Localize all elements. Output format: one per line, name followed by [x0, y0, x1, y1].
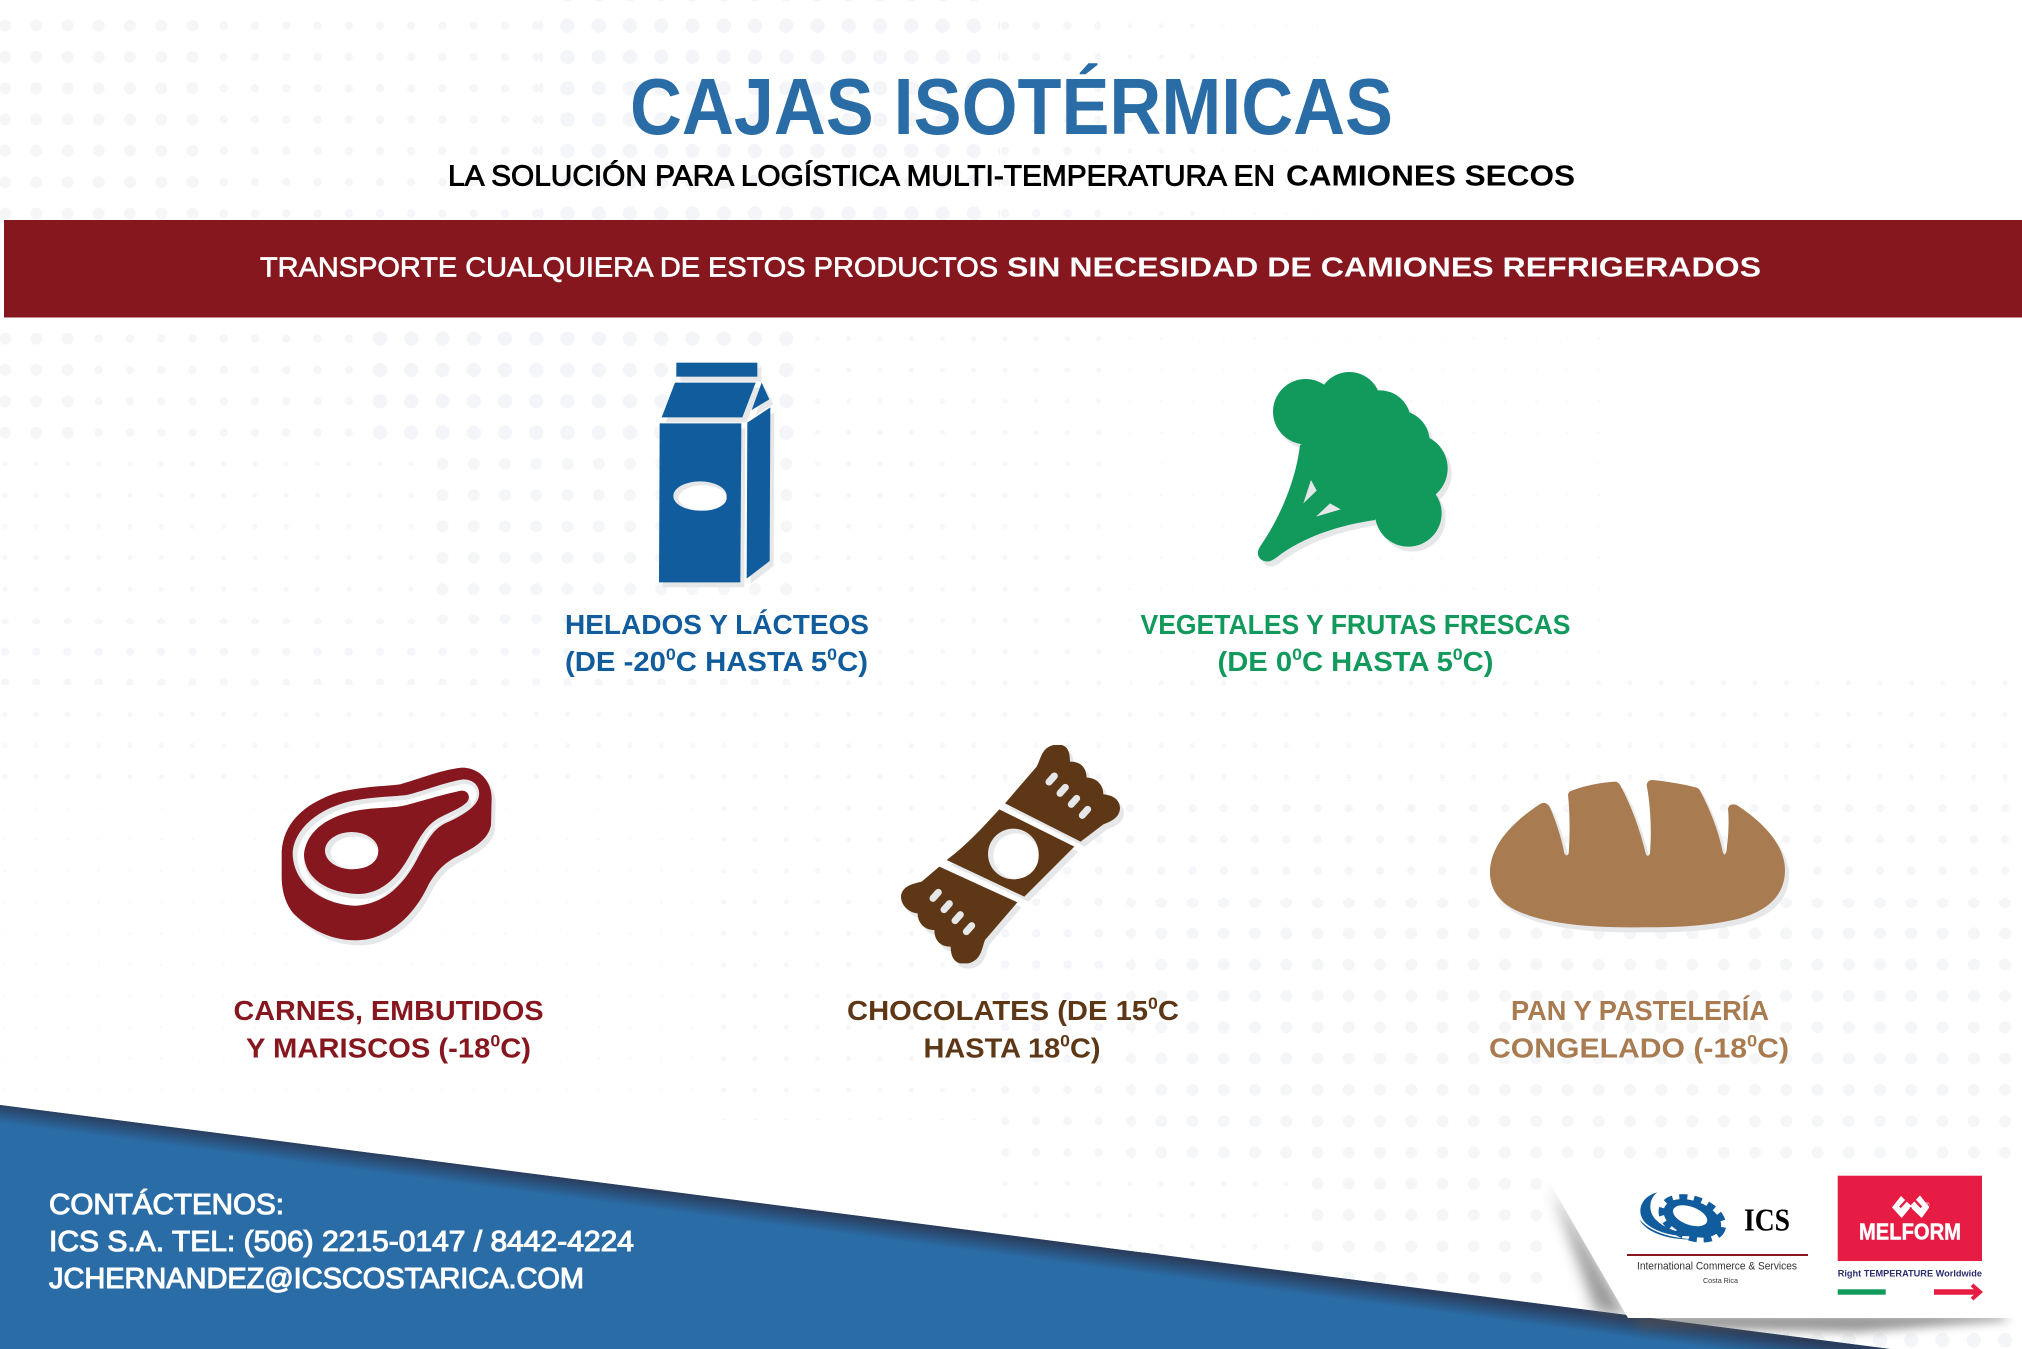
label: vegetales y frutas: C HASTA 5: [1302, 646, 1453, 677]
label: vegetales y frutas: (DE 0: [1218, 646, 1289, 677]
logo: ICS: ICS: [1744, 1202, 1790, 1238]
label: chocolates: C): [1070, 1032, 1100, 1063]
label: helados y lacteos: [565, 609, 869, 677]
label: chocolates: CHOCOLATES (DE 15: [847, 995, 1136, 1026]
label: chocolates: C: [1158, 995, 1179, 1026]
subtitle: CAMIONES SECOS: [1286, 160, 1575, 192]
label: carnes: Y MARISCOS (-18: [246, 1032, 480, 1063]
contact text: [49, 1188, 634, 1295]
label: chocolates: HASTA 18: [924, 1032, 1056, 1063]
label: helados y lacteos: 0: [827, 645, 837, 664]
label: helados y lacteos: C HASTA 5: [676, 646, 827, 677]
label: vegetales y frutas: [1140, 609, 1570, 677]
icon: bread: [1490, 780, 1785, 927]
icon: gear: [1639, 1189, 1729, 1247]
banner text: TRANSPORTE CUALQUIERA DE ESTOS PRODUCTOS: [260, 252, 998, 282]
label: chocolates: [847, 994, 1179, 1063]
footer: blue band: [0, 1105, 1890, 1349]
contact text: ICS S.A. TEL: (506) 2215-0147 / 8442-4224: [49, 1226, 634, 1258]
label: carnes: CARNES, EMBUTIDOS: [234, 995, 544, 1026]
logo: ICS: Costa Rica: [1703, 1276, 1739, 1285]
icon: melform symbol: [1892, 1195, 1929, 1219]
label: pan y pasteleria: PAN Y PASTELERÍA: [1511, 995, 1769, 1026]
arrow: [1934, 1285, 1980, 1299]
icon: chocolate bar: [901, 745, 1120, 963]
label: helados y lacteos: C): [837, 646, 868, 677]
label: carnes: 0: [490, 1031, 500, 1050]
logo: Melform: MELFORM: [1859, 1218, 1961, 1244]
label: carnes: [234, 995, 544, 1063]
banner text: SIN NECESIDAD DE CAMIONES REFRIGERADOS: [1007, 252, 1761, 282]
label: chocolates: 0: [1060, 1031, 1070, 1050]
icon: broccoli: [1258, 372, 1448, 561]
label: helados y lacteos: 0: [666, 645, 676, 664]
label: vegetales y frutas: 0: [1292, 645, 1302, 664]
label: vegetales y frutas: VEGETALES Y FRUTAS FRESCAS: [1140, 609, 1570, 640]
label: helados y lacteos: HELADOS Y LÁCTEOS: [565, 609, 869, 640]
label: vegetales y frutas: C): [1463, 646, 1494, 677]
contact text: CONTÁCTENOS:: [49, 1188, 284, 1221]
logo: ICS: [1627, 1189, 1808, 1285]
label: pan y pasteleria: [1489, 995, 1789, 1063]
label: pan y pasteleria: 0: [1747, 1031, 1757, 1050]
label: chocolates: 0: [1148, 994, 1158, 1013]
logo panel: [1536, 1159, 2022, 1332]
banner text: [260, 252, 1761, 282]
subtitle: LA SOLUCIÓN PARA LOGÍSTICA MULTI-TEMPERATURA EN: [448, 160, 1275, 192]
label: carnes: C): [500, 1032, 531, 1063]
icon: milk carton: [659, 363, 770, 582]
logo: Melform: Right TEMPERATURE Worldwide: [1838, 1269, 1982, 1280]
subtitle: [448, 160, 1575, 192]
label: pan y pasteleria: C): [1757, 1032, 1789, 1063]
logo: ICS: International Commerce & Services: [1637, 1260, 1797, 1272]
logo: Melform: [1838, 1176, 1982, 1299]
label: vegetales y frutas: 0: [1453, 645, 1463, 664]
banner: [4, 220, 2022, 318]
label: helados y lacteos: (DE -20: [565, 646, 661, 677]
contact text: JCHERNANDEZ@ICSCOSTARICA.COM: [49, 1263, 584, 1295]
logo: Melform: ®: [1925, 1202, 1930, 1209]
icon: meat steak: [282, 768, 492, 940]
label: pan y pasteleria: CONGELADO (-18: [1489, 1032, 1729, 1063]
title: CAJAS ISOTÉRMICAS: [630, 62, 1393, 151]
